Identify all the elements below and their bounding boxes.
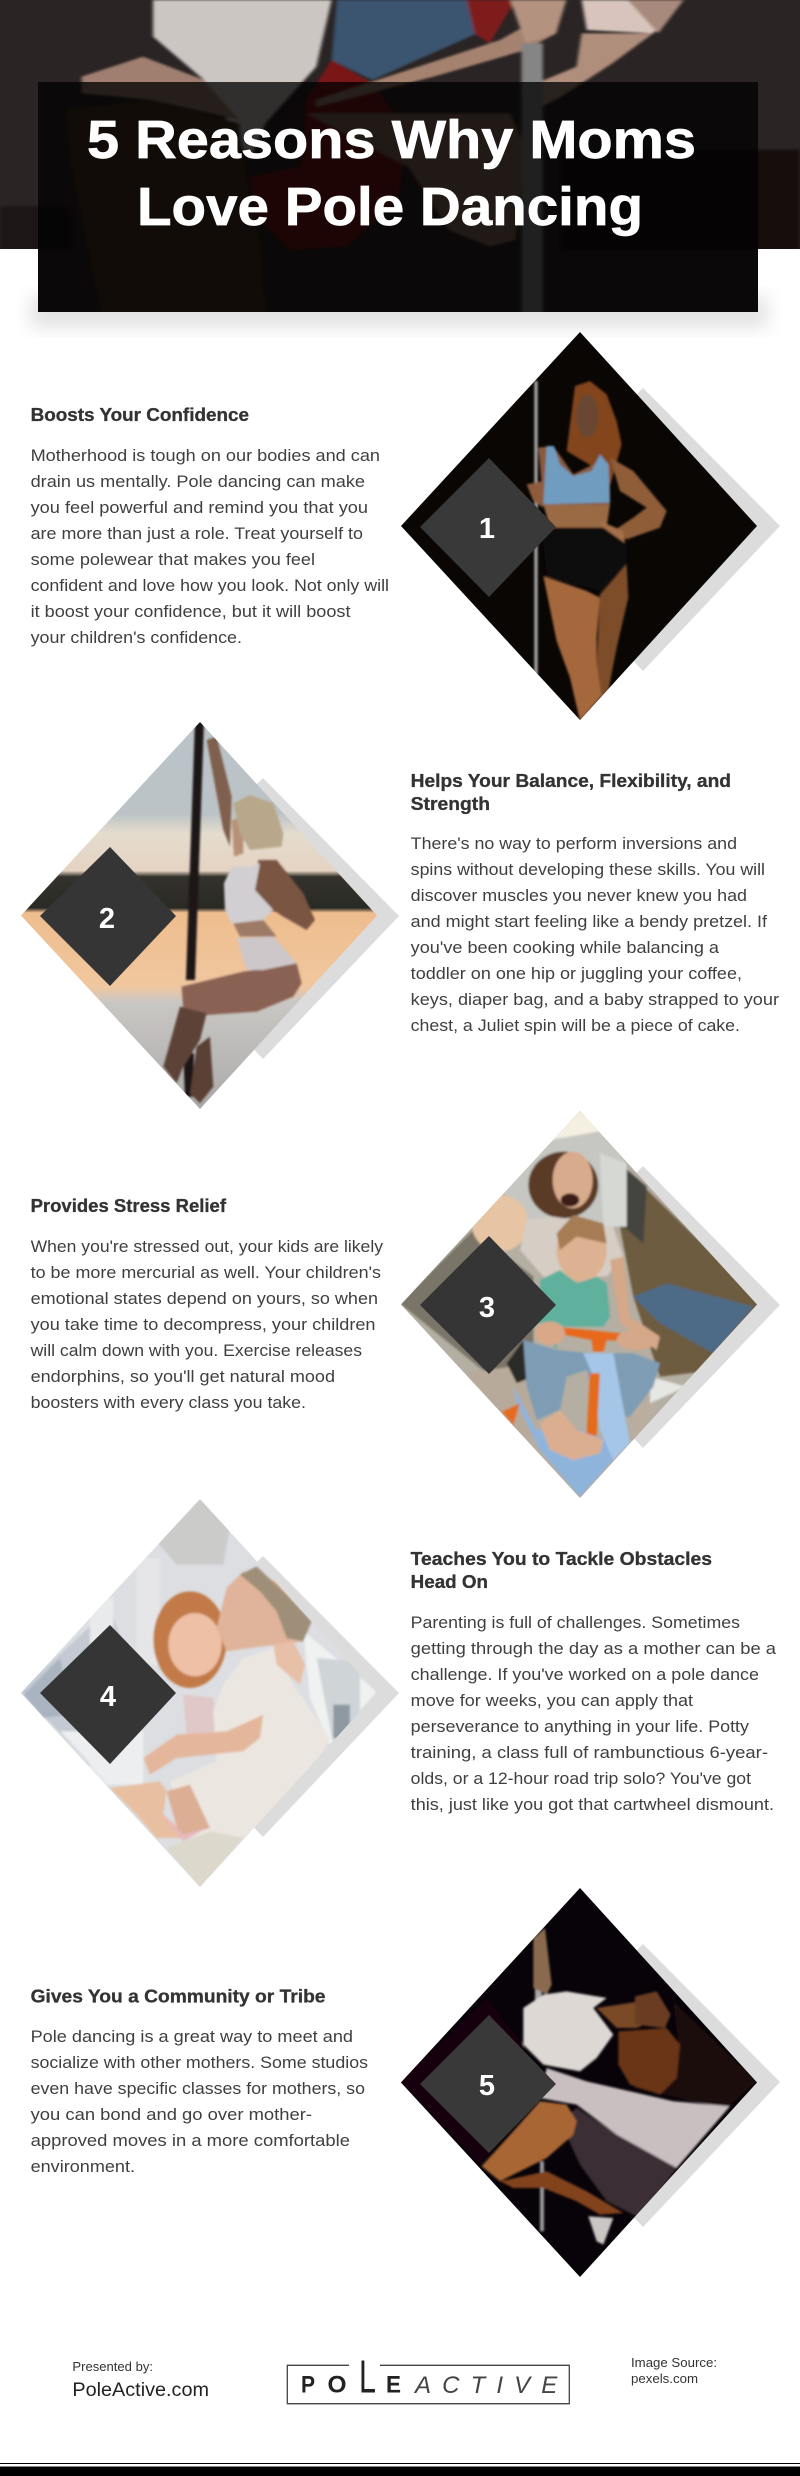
title: 5 Reasons Why Moms — [87, 110, 696, 170]
number badge 4: 4 — [100, 1681, 116, 1713]
grey offset diamond 1 — [506, 388, 780, 671]
text: stress relief: boosters with every class you take. — [31, 1394, 306, 1412]
text: boosts your confidence: confident and love how you look. Not only will — [31, 577, 389, 595]
text: tackle obstacles head on: training, a class full of rambunctious 6-year- — [411, 1744, 768, 1762]
photo: mother kissing daughter — [15, 1495, 385, 1895]
photo: dancer in blue top — [395, 325, 765, 725]
photo: mother and son on ride-on toy — [395, 1105, 767, 1505]
grey offset diamond 3 — [506, 1166, 780, 1448]
text: stress relief: emotional states depend on yours, so when — [31, 1290, 378, 1308]
panel: reason 5 — [31, 1880, 780, 2285]
text: tackle obstacles head on: move for weeks, you can apply that — [411, 1692, 693, 1710]
logo: PoleActive: O — [328, 2372, 346, 2399]
photo: dancer at the lake — [21, 722, 377, 1109]
image source: Image Source: — [631, 2355, 717, 2370]
text: community or tribe: Pole dancing is a great way to meet and — [31, 2028, 353, 2046]
number badge 3 — [420, 1236, 556, 1374]
presented by — [72, 2359, 209, 2401]
text: boosts your confidence: your children's confidence. — [31, 629, 242, 647]
bottom bar — [0, 2463, 800, 2476]
text: tackle obstacles head on: challenge. If you've worked on a pole dance — [411, 1666, 759, 1684]
grey offset diamond 2 — [127, 778, 399, 1059]
text: tackle obstacles head on: perseverance to anything in your life. Potty — [411, 1718, 750, 1736]
grey offset diamond 5 — [506, 1944, 780, 2227]
text: tackle obstacles head on: Teaches You to Tackle Obstacles — [411, 1549, 712, 1569]
image source — [631, 2355, 717, 2386]
title panel — [38, 82, 758, 312]
text: boosts your confidence: drain us mentally. Pole dancing can make — [31, 473, 365, 491]
text: community or tribe: even have specific classes for mothers, so — [31, 2080, 365, 2098]
panel: reason 4 — [15, 1495, 777, 1895]
title: Love Pole Dancing — [137, 177, 643, 237]
text: balance, flexibility and strength: Strength — [411, 794, 490, 814]
text: boosts your confidence: it boost your confidence, but it will boost — [31, 603, 351, 621]
image source: pexels.com — [631, 2371, 698, 2386]
text: community or tribe — [31, 1986, 368, 2176]
footer — [72, 2351, 717, 2404]
text: balance, flexibility and strength: chest, a Juliet spin will be a piece of cake. — [411, 1017, 740, 1035]
number badge 4 — [40, 1625, 176, 1764]
text: community or tribe: Gives You a Community or Tribe — [31, 1986, 325, 2006]
text: balance, flexibility and strength: discover muscles you never knew you had — [411, 887, 747, 905]
logo: PoleActive: E — [386, 2372, 401, 2399]
number badge 5: 5 — [479, 2070, 495, 2102]
number badge 5 — [420, 2015, 556, 2153]
logo: PoleActive: L — [359, 2351, 376, 2403]
text: boosts your confidence: Boosts Your Confidence — [31, 405, 249, 425]
text: boosts your confidence: are more than just a role. Treat yourself to — [31, 525, 363, 543]
photo: dancer in white dress — [395, 1880, 765, 2285]
text: tackle obstacles head on: this, just like you got that cartwheel dismount. — [411, 1796, 774, 1814]
number badge 1 — [420, 458, 556, 597]
grey offset diamond 4 — [127, 1556, 399, 1837]
panel: reason 2 — [10, 720, 780, 1112]
text: stress relief: will calm down with you. Exercise releases — [30, 1342, 362, 1360]
text: tackle obstacles head on: Head On — [411, 1572, 488, 1592]
text: tackle obstacles head on — [411, 1549, 777, 1814]
text: boosts your confidence: some polewear that makes you feel — [31, 551, 315, 569]
header banner — [0, 0, 800, 333]
text: boosts your confidence: you feel powerful and remind you that you — [31, 499, 368, 517]
text: balance, flexibility and strength: toddler on one hip or juggling your coffee, — [411, 965, 742, 983]
text: balance, flexibility and strength: you've been cooking while balancing a — [411, 939, 720, 957]
text: stress relief: to be more mercurial as well. Your children's — [31, 1264, 381, 1282]
text: balance, flexibility and strength: Helps Your Balance, Flexibility, and — [411, 771, 731, 791]
number badge 3: 3 — [479, 1292, 495, 1324]
number badge 2 — [40, 847, 176, 986]
text: community or tribe: socialize with other mothers. Some studios — [31, 2054, 368, 2072]
text: balance, flexibility and strength: There's no way to perform inversions and — [411, 835, 737, 853]
logo: PoleActive: ACTIVE — [413, 2372, 558, 2399]
header photo — [0, 0, 800, 333]
text: tackle obstacles head on: olds, or a 12-hour road trip solo? You've got — [411, 1770, 751, 1788]
text: tackle obstacles head on: getting through the day as a mother can be a — [411, 1640, 777, 1658]
text: balance, flexibility and strength: keys, diaper bag, and a baby strapped to your — [411, 991, 780, 1009]
text: community or tribe: environment. — [31, 2158, 135, 2176]
text: balance, flexibility and strength: and might start feeling like a bendy pretzel. If — [411, 913, 767, 931]
presented by: PoleActive.com — [72, 2380, 209, 2401]
text: boosts your confidence — [31, 405, 389, 647]
panel: reason 3 — [30, 1105, 780, 1505]
number badge 1: 1 — [479, 513, 495, 545]
logo: PoleActive — [287, 2351, 569, 2404]
panel: reason 1 — [31, 325, 780, 725]
text: balance, flexibility and strength: spins without developing these skills. You will — [411, 861, 765, 879]
text: stress relief — [30, 1196, 384, 1412]
text: community or tribe: you can bond and go over mother- — [31, 2106, 312, 2124]
title — [87, 110, 696, 237]
text: community or tribe: approved moves in a more comfortable — [31, 2132, 350, 2150]
text: tackle obstacles head on: Parenting is full of challenges. Sometimes — [411, 1614, 740, 1632]
presented by: Presented by: — [72, 2359, 153, 2374]
text: stress relief: Provides Stress Relief — [31, 1196, 227, 1216]
text: balance, flexibility and strength — [411, 771, 780, 1035]
text: stress relief: endorphins, so you'll get natural mood — [31, 1368, 335, 1386]
logo: PoleActive: P — [301, 2372, 315, 2399]
text: stress relief: When you're stressed out, your kids are likely — [31, 1238, 384, 1256]
text: boosts your confidence: Motherhood is tough on our bodies and can — [31, 447, 380, 465]
text: stress relief: you take time to decompress, your children — [31, 1316, 375, 1334]
number badge 2: 2 — [99, 903, 115, 935]
